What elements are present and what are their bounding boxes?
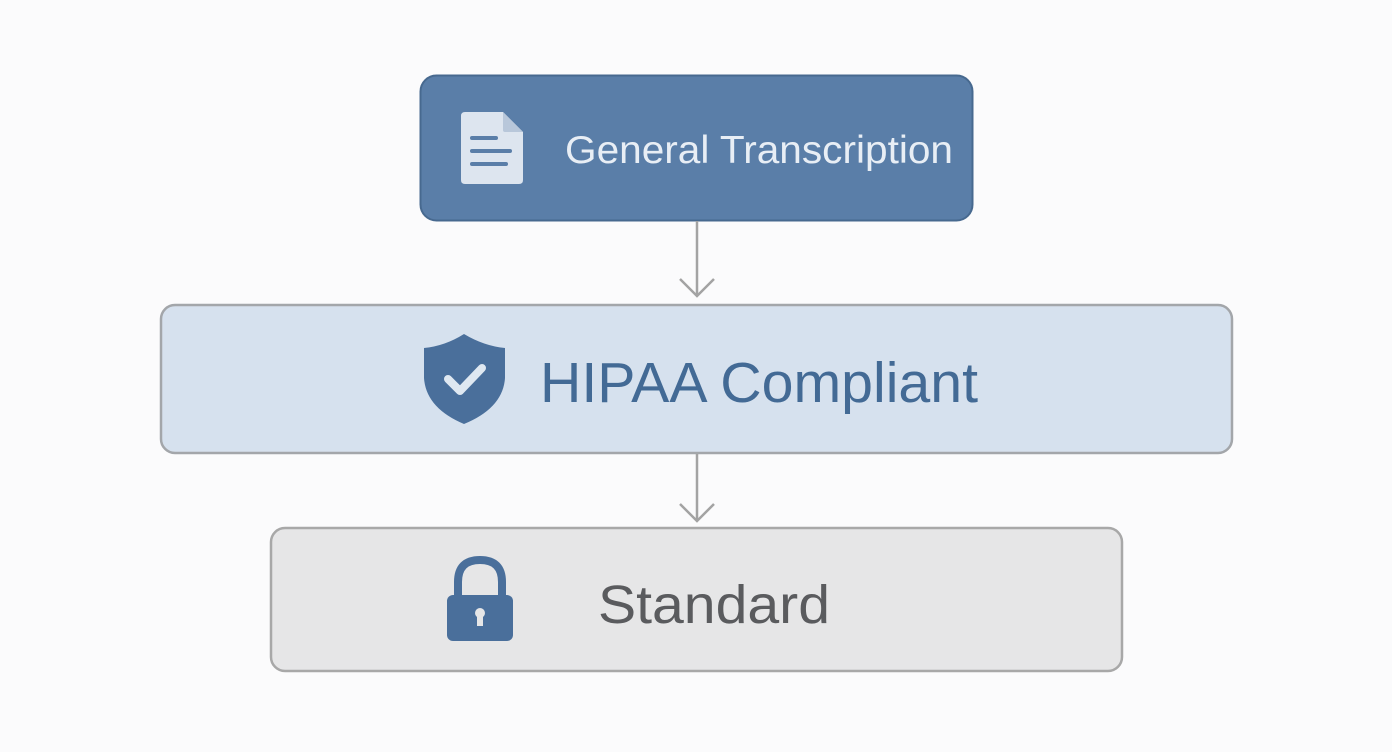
- icon: padlock: [447, 560, 513, 641]
- arrow 1: [680, 221, 714, 296]
- heading: HIPAA Compliant: HIPAA Compliant: [540, 351, 978, 415]
- icon: shield check: [424, 334, 505, 424]
- heading: Standard: Standard: [598, 575, 830, 635]
- panel: Standard: [271, 528, 1122, 671]
- arrow 2: [680, 454, 714, 521]
- heading: General Transcription: General Transcription: [565, 129, 953, 172]
- panel: General Transcription: [420, 76, 972, 220]
- icon: document: [461, 112, 523, 184]
- panel: HIPAA Compliant: [161, 305, 1232, 453]
